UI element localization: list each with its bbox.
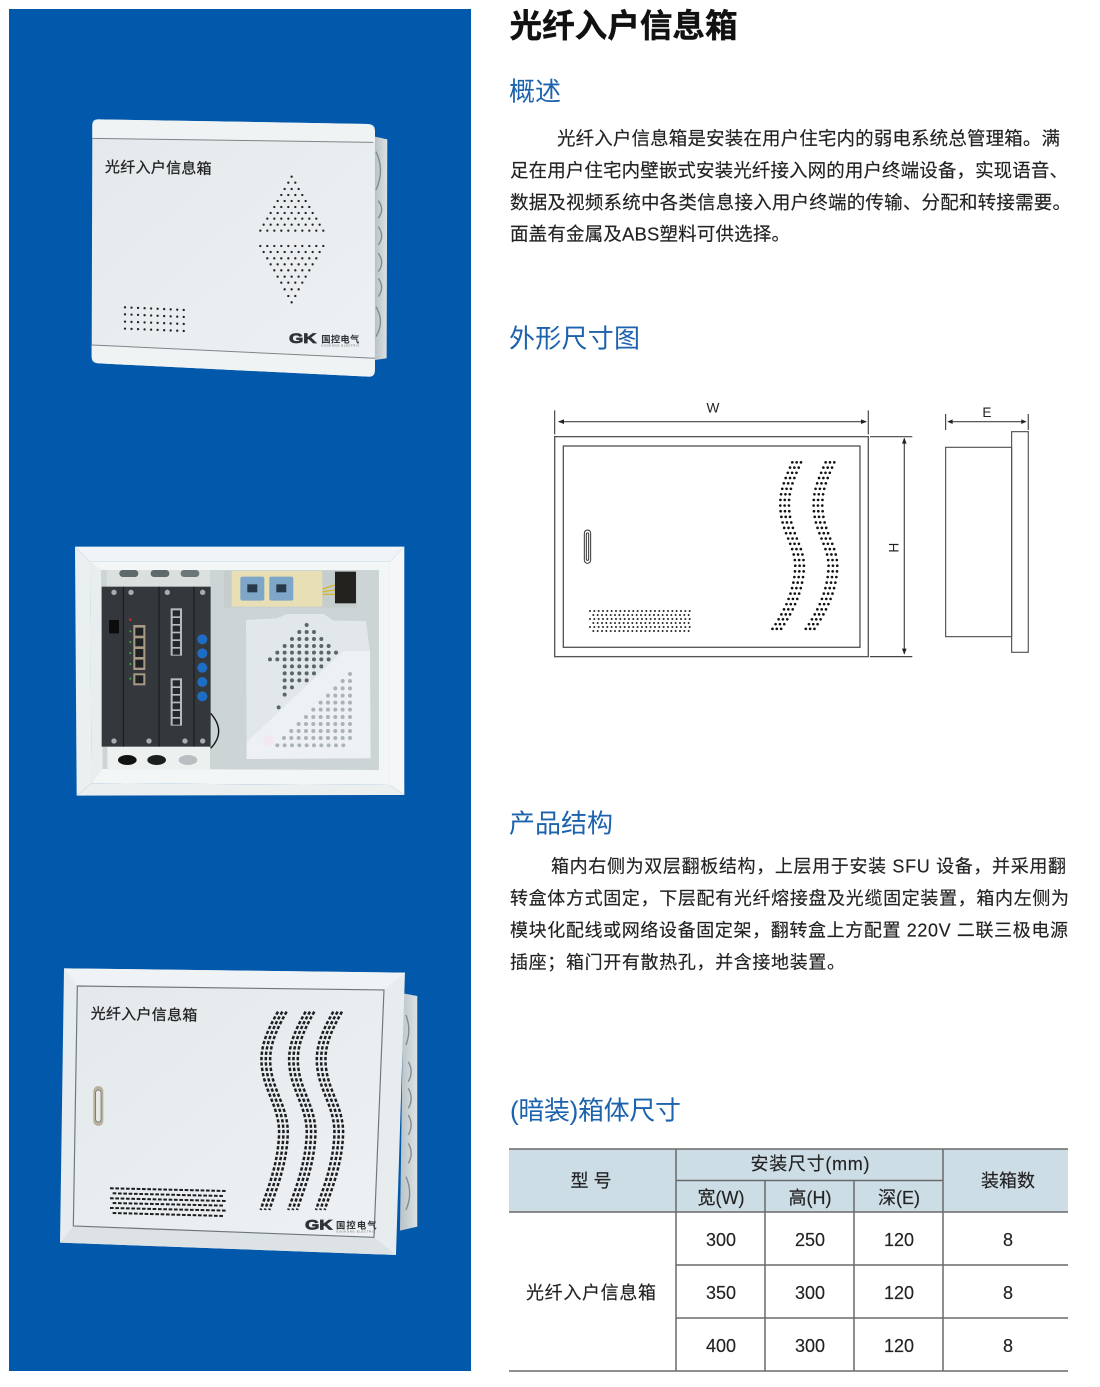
table: box dimensions — [509, 1149, 1068, 1371]
brand logo: GK — [305, 1217, 333, 1233]
text block: overview — [510, 128, 1071, 244]
text block: product structure: 箱内右侧为双层翻板结构，上层用于安装 SFU 设备，并采用翻 — [551, 856, 1066, 876]
outer and inner door outlines — [555, 437, 868, 657]
text block: overview: 面盖有金属及ABS塑料可供选择。 — [510, 224, 790, 244]
frame bevels — [75, 547, 404, 796]
product photo: closed box with wave vents — [60, 968, 417, 1255]
box side with knockouts — [375, 137, 387, 360]
table row 2: 120 — [884, 1283, 914, 1303]
box side with knockouts — [400, 993, 417, 1231]
text block: product structure — [510, 856, 1069, 972]
table header labels: 装箱数 — [981, 1171, 1035, 1191]
table header background — [509, 1149, 1068, 1212]
brand logo: GK — [289, 330, 317, 346]
table header labels: 高(H) — [788, 1188, 832, 1208]
table row 1: 300 — [706, 1230, 736, 1250]
table row 2: 300 — [795, 1283, 825, 1303]
table row 1: 8 — [1003, 1230, 1013, 1250]
table row 3: 300 — [795, 1336, 825, 1356]
table row 2: 8 — [1003, 1283, 1013, 1303]
width dimension W: W — [707, 400, 720, 415]
height dimension H: H — [886, 543, 901, 553]
table header labels — [570, 1154, 1035, 1208]
brand logo — [289, 330, 360, 347]
heading: box dimensions: (暗装)箱体尺寸 — [510, 1096, 681, 1126]
network modules — [102, 587, 219, 748]
text block: overview: 光纤入户信息箱是安装在用户住宅内的弱电系统总管理箱。满 — [557, 128, 1060, 149]
heading: dimension drawing: 外形尺寸图 — [509, 324, 640, 354]
brand logo: GUOKONG ELECTRIC — [321, 343, 359, 347]
recess — [101, 570, 379, 770]
text block: product structure: 转盒体方式固定，下层配有光纤熔接盘及光缆固定装置，箱内左侧为 — [510, 888, 1069, 908]
bottom bracket — [107, 747, 210, 770]
table row 2: 350 — [706, 1283, 736, 1303]
power socket strip — [224, 571, 357, 608]
box front — [92, 119, 375, 377]
brand logo: GUOKONG ELECTRIC — [336, 1229, 375, 1233]
brand logo — [305, 1217, 377, 1233]
table row 1 — [706, 1230, 1013, 1250]
title: 光纤入户信息箱 — [510, 7, 738, 44]
depth dimension E — [946, 405, 1028, 430]
text block: overview: 数据及视频系统中各类信息接入用户终端的传输、分配和转接需要。 — [510, 192, 1071, 213]
text block: product structure: 模块化配线或网络设备固定架，翻转盒上方配置 220V 二联三极电源 — [510, 920, 1068, 940]
table model name: 光纤入户信息箱 — [526, 1283, 656, 1303]
heading: overview: 概述 — [509, 76, 561, 106]
flip-down tray: front panel — [247, 651, 371, 759]
door handle — [93, 1086, 103, 1126]
table header labels: 宽(W) — [698, 1188, 744, 1208]
vent: upper diamond — [260, 177, 324, 231]
vent: slot grille — [110, 1188, 226, 1216]
vent: dotted grille — [590, 611, 694, 631]
product photo: closed box with diamond vents — [92, 119, 387, 377]
diagram: front view with dimensions — [555, 400, 912, 657]
table row 3: 400 — [706, 1336, 736, 1356]
table row 3: 8 — [1003, 1336, 1013, 1356]
flip-down tray: back panel — [246, 614, 370, 755]
box label: 光纤入户信息箱 — [105, 159, 212, 178]
frame — [60, 968, 405, 1255]
brand logo: 国控电气 — [336, 1220, 377, 1231]
table grid — [509, 1149, 1068, 1371]
heading: product structure: 产品结构 — [509, 808, 613, 838]
text block: product structure: 插座；箱门开有散热孔，并含接地装置。 — [510, 952, 845, 972]
vent: wave strips — [771, 462, 837, 631]
table row 3 — [706, 1336, 1013, 1356]
table header labels: 型 号 — [570, 1171, 612, 1191]
height dimension H — [870, 437, 912, 657]
table row 1: 120 — [884, 1230, 914, 1250]
text block: overview: 足在用户住宅内壁嵌式安装光纤接入网的用户终端设备，实现语音、 — [510, 160, 1068, 181]
width dimension W — [555, 400, 868, 434]
vent: lower diamond — [260, 246, 324, 302]
brand logo: 国控电气 — [321, 333, 360, 344]
top bracket — [107, 570, 210, 587]
door handle — [584, 530, 591, 563]
table row 3: 120 — [884, 1336, 914, 1356]
diagram: side view with depth dimension — [946, 405, 1028, 652]
door — [73, 986, 384, 1237]
table header labels: 深(E) — [878, 1188, 920, 1208]
product photo: open box interior — [75, 547, 404, 796]
vent: small grille — [125, 307, 184, 331]
panel: blue product photo column — [9, 9, 471, 1371]
table row 2 — [706, 1283, 1013, 1303]
table row 1: 250 — [795, 1230, 825, 1250]
depth dimension E: E — [982, 405, 992, 420]
table header labels: 安装尺寸(mm) — [750, 1154, 870, 1174]
vent: three wave strips — [261, 1012, 343, 1210]
box label: 光纤入户信息箱 — [90, 1006, 197, 1025]
